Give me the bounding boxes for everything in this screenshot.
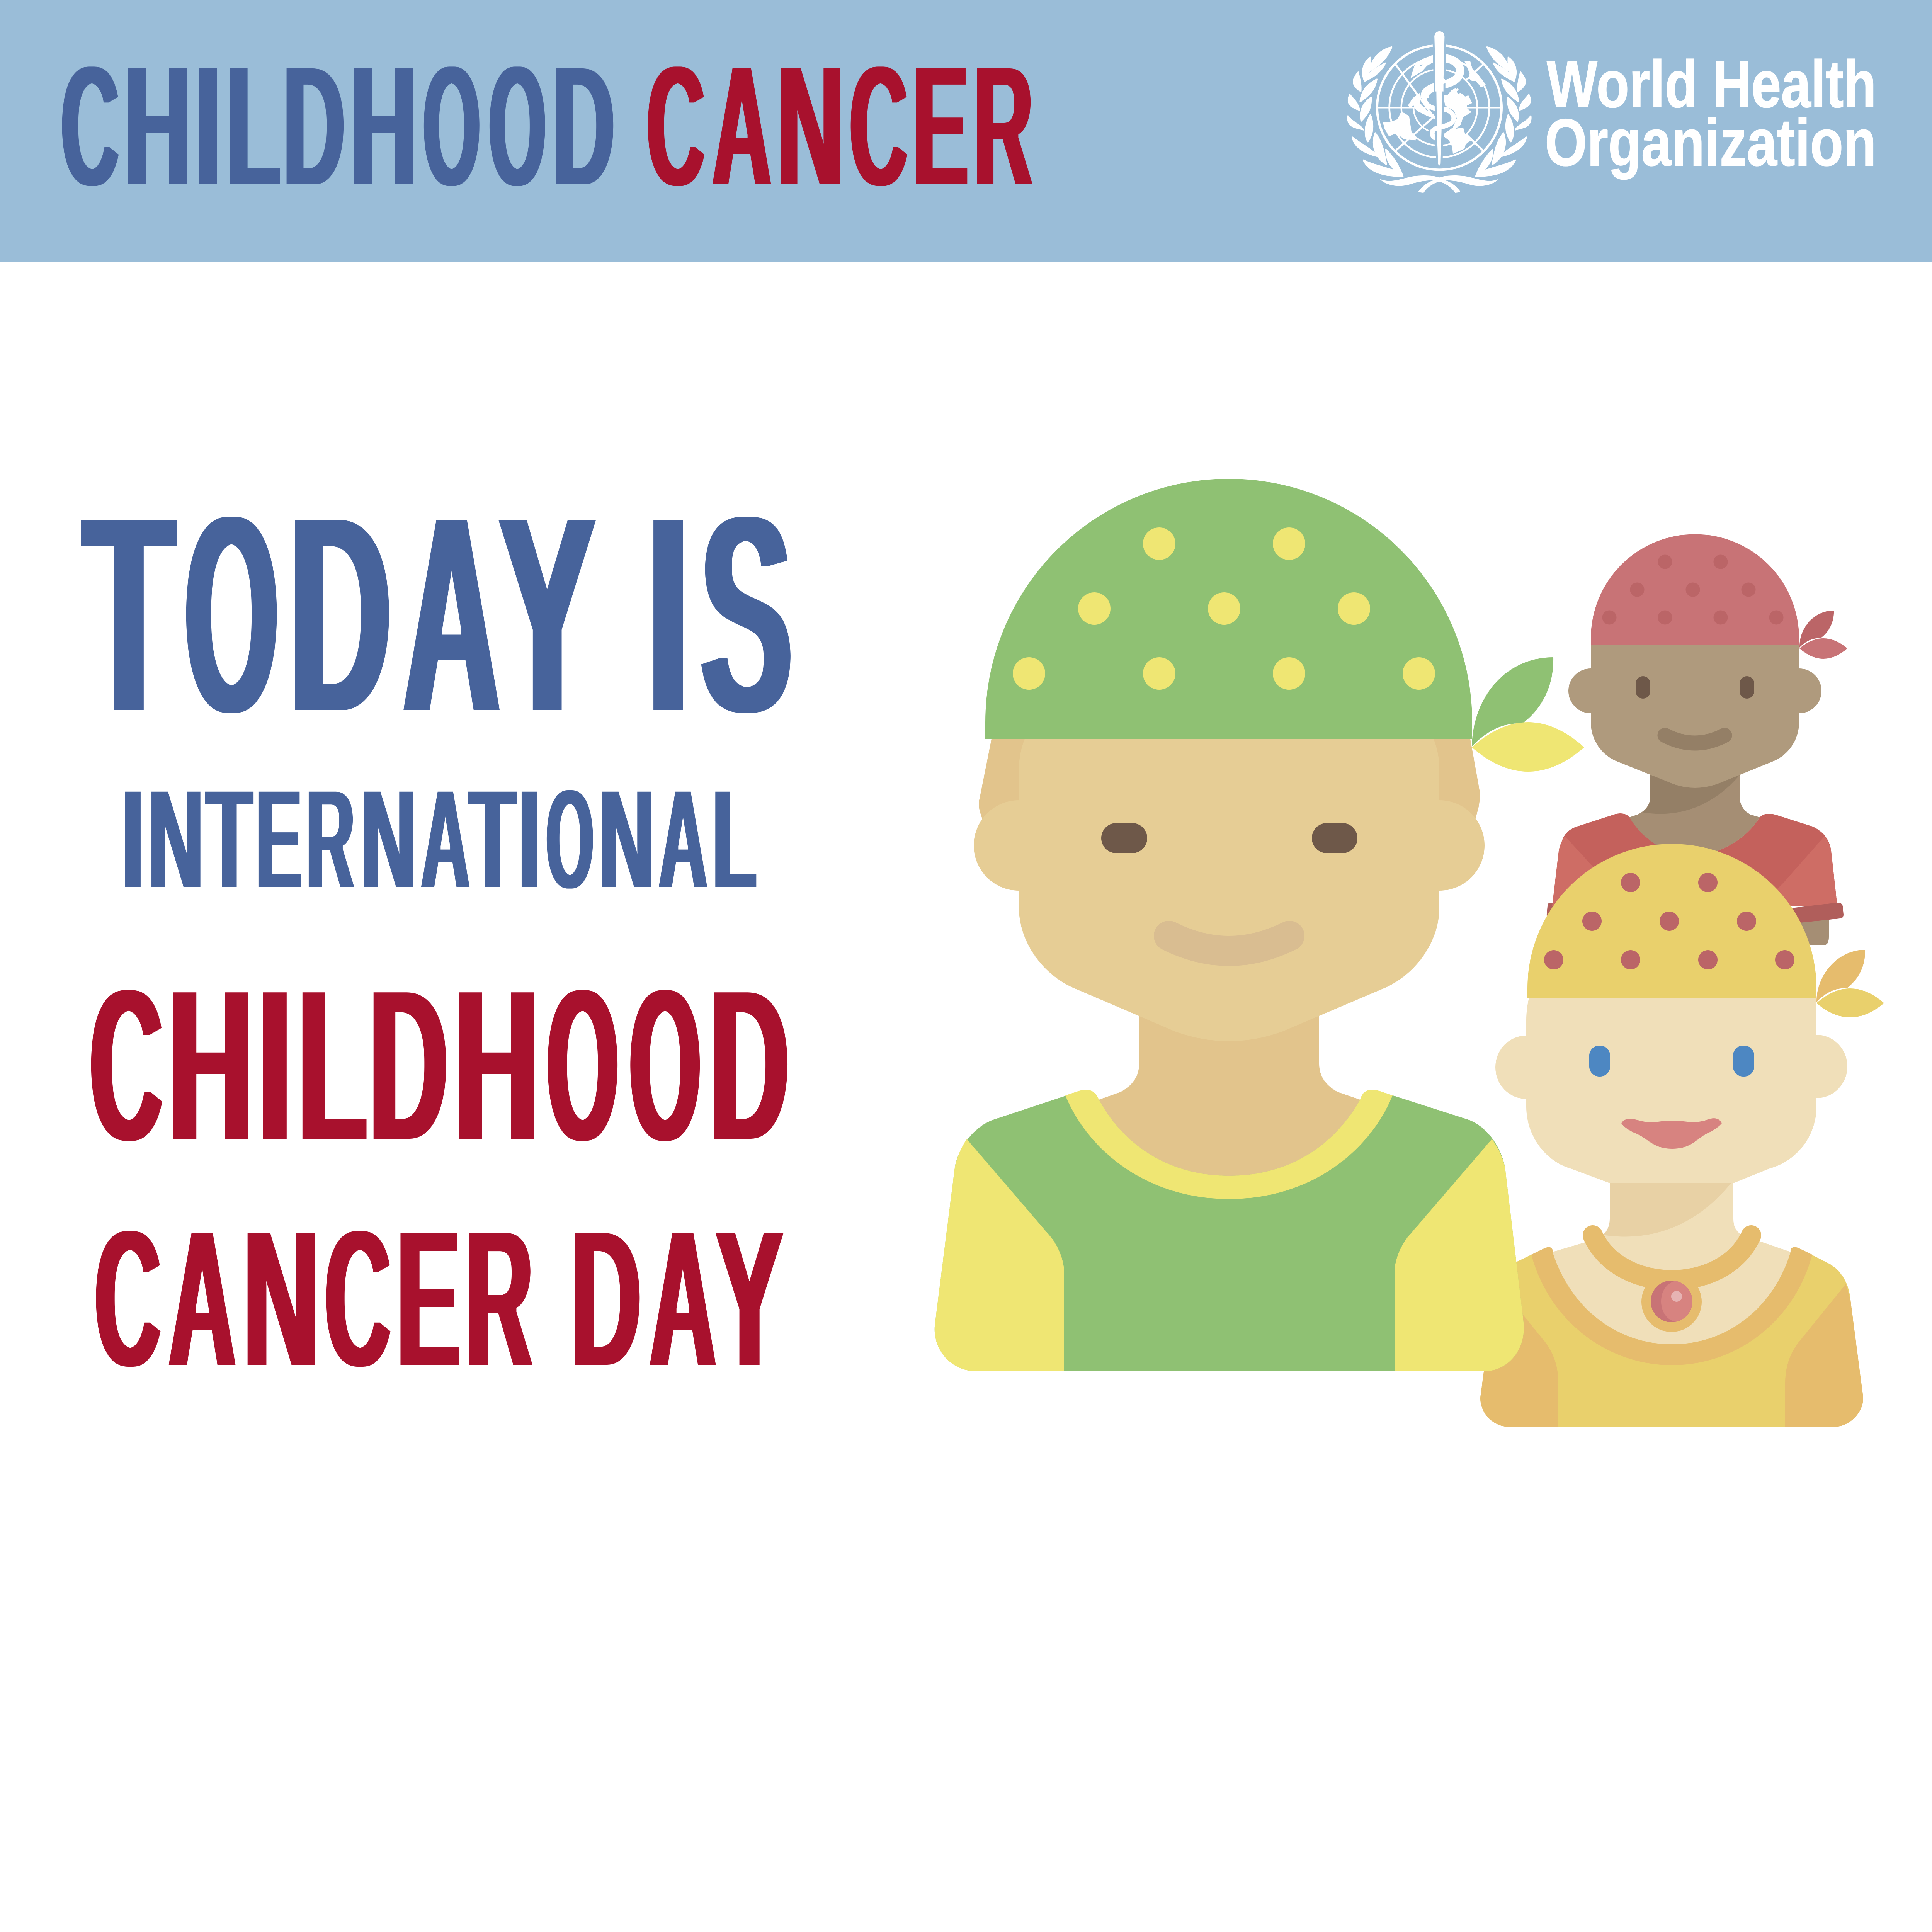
brown child ears bbox=[1568, 668, 1821, 713]
text: C bbox=[850, 29, 908, 223]
title: childhood cancer: N bbox=[777, 29, 844, 223]
title: childhood cancer: A bbox=[712, 29, 771, 223]
line: international: N bbox=[148, 759, 204, 919]
line: today is: T bbox=[83, 455, 175, 773]
line: international: A bbox=[421, 759, 470, 919]
blonde child head bbox=[1526, 998, 1816, 1183]
blonde child necklace bbox=[1593, 1235, 1751, 1332]
line: childhood: C bbox=[90, 942, 163, 1187]
red bandana dots bbox=[1602, 555, 1784, 624]
title: childhood cancer bbox=[61, 29, 1033, 223]
emblem staff bbox=[1432, 31, 1448, 165]
headline: today is international childhood cancer day: L bbox=[713, 759, 757, 919]
brown child shirt bbox=[1552, 813, 1837, 906]
yellow bandana bbox=[1527, 844, 1816, 998]
line: international: I bbox=[518, 759, 541, 919]
emblem wreath right bbox=[1439, 47, 1531, 192]
blonde child shirt bbox=[1480, 1248, 1863, 1427]
main child collar bbox=[1065, 1090, 1393, 1199]
blonde child mouth bbox=[1621, 1118, 1722, 1149]
emblem continents bbox=[1383, 61, 1486, 154]
text: O bbox=[630, 942, 701, 1187]
title: childhood cancer: O bbox=[423, 29, 480, 223]
emblem globe rings bbox=[1377, 45, 1502, 170]
yellow bandana knot bbox=[1816, 950, 1884, 1017]
green bandana dots bbox=[1013, 527, 1435, 690]
text: S bbox=[701, 455, 792, 773]
main child eyes bbox=[1101, 823, 1357, 853]
line: cancer day: C bbox=[95, 1189, 161, 1408]
line: today is: Y bbox=[498, 455, 596, 773]
line: cancer day: R bbox=[466, 1189, 533, 1408]
line: international: R bbox=[306, 759, 355, 919]
line: childhood: I bbox=[258, 942, 292, 1187]
blonde child eyes bbox=[1589, 1046, 1754, 1077]
line: today is: A bbox=[403, 455, 500, 773]
red bandana bbox=[1591, 534, 1799, 645]
title: childhood cancer: I bbox=[195, 29, 221, 223]
brown child left wristband bbox=[1547, 903, 1561, 918]
green bandana knot bbox=[1472, 657, 1584, 772]
headline: today is international childhood cancer day bbox=[83, 455, 913, 1408]
blonde child neck shadow bbox=[1603, 1182, 1732, 1237]
title: childhood cancer: H bbox=[350, 29, 417, 223]
line: international: N bbox=[361, 759, 416, 919]
line: childhood: L bbox=[298, 942, 367, 1187]
main child sleeves bbox=[935, 1139, 1524, 1371]
text: R bbox=[974, 29, 1033, 223]
main child neck and chest bbox=[1099, 989, 1360, 1176]
blonde child collar band bbox=[1531, 1247, 1812, 1365]
blonde child sleeves bbox=[1480, 1284, 1863, 1427]
green bandana bbox=[985, 479, 1472, 739]
line: international bbox=[122, 759, 757, 919]
title: childhood cancer: O bbox=[489, 29, 546, 223]
line: international: T bbox=[206, 759, 252, 919]
line: childhood: H bbox=[168, 942, 253, 1187]
child illustration: brown child with red bandana bbox=[1547, 534, 1847, 945]
text: D bbox=[710, 942, 789, 1187]
headline: today is international childhood cancer day: D bbox=[571, 1189, 641, 1408]
main child shirt body bbox=[935, 1090, 1524, 1371]
logo wordmark bbox=[1545, 47, 1876, 180]
brown child chest bbox=[1629, 773, 1760, 862]
line: cancer day: N bbox=[243, 1189, 319, 1408]
line: international: E bbox=[256, 759, 302, 919]
headline: today is international childhood cancer day: O bbox=[547, 942, 618, 1187]
headline: today is international childhood cancer day: N bbox=[599, 759, 654, 919]
red bandana knot bbox=[1799, 611, 1847, 659]
blonde child chest bbox=[1553, 1182, 1791, 1344]
main child mouth bbox=[1169, 936, 1289, 951]
line: international: I bbox=[122, 759, 144, 919]
title: childhood cancer: L bbox=[227, 29, 281, 223]
main child ears bbox=[974, 800, 1485, 891]
brown child arm bbox=[1777, 912, 1829, 945]
brown child neck shadow bbox=[1642, 773, 1740, 814]
line: today is: D bbox=[289, 455, 391, 773]
brown child eyes bbox=[1636, 676, 1754, 699]
text: E bbox=[913, 29, 968, 223]
child illustration: blonde child with yellow bandana bbox=[1480, 844, 1884, 1427]
line: cancer day: E bbox=[397, 1189, 460, 1408]
text: Y bbox=[715, 1189, 784, 1408]
headline: today is international childhood cancer day: A bbox=[658, 759, 707, 919]
title: childhood cancer: D bbox=[553, 29, 615, 223]
headline: today is international childhood cancer day: O bbox=[546, 759, 594, 919]
yellow bandana dots bbox=[1544, 873, 1794, 969]
line: childhood: D bbox=[369, 942, 448, 1187]
emblem ribbon bbox=[1379, 175, 1499, 186]
line: cancer day: A bbox=[168, 1189, 236, 1408]
line: today is: I bbox=[647, 455, 689, 773]
title: childhood cancer: D bbox=[283, 29, 345, 223]
line: international: T bbox=[469, 759, 515, 919]
line: today is: O bbox=[185, 455, 278, 773]
brown child mouth bbox=[1665, 735, 1725, 743]
child illustration: main child with green bandana bbox=[935, 479, 1584, 1371]
brown child head bbox=[1591, 641, 1799, 788]
title: childhood cancer: C bbox=[647, 29, 705, 223]
brown child sleeves bbox=[1552, 836, 1837, 906]
main child head bbox=[1019, 739, 1439, 1041]
line: cancer day: C bbox=[325, 1189, 391, 1408]
WHO logo bbox=[1348, 31, 1876, 192]
main child hair behind ears bbox=[979, 739, 1480, 823]
title: childhood cancer: C bbox=[61, 29, 119, 223]
title: childhood cancer: H bbox=[124, 29, 191, 223]
emblem wreath left bbox=[1348, 47, 1439, 192]
emblem snake bbox=[1410, 54, 1460, 138]
text: A bbox=[650, 1189, 716, 1408]
WHO emblem bbox=[1348, 31, 1531, 192]
blonde child ears bbox=[1495, 1035, 1847, 1099]
brown child right wristband bbox=[1785, 903, 1844, 923]
line: childhood: H bbox=[454, 942, 539, 1187]
header banner bbox=[0, 0, 1932, 262]
